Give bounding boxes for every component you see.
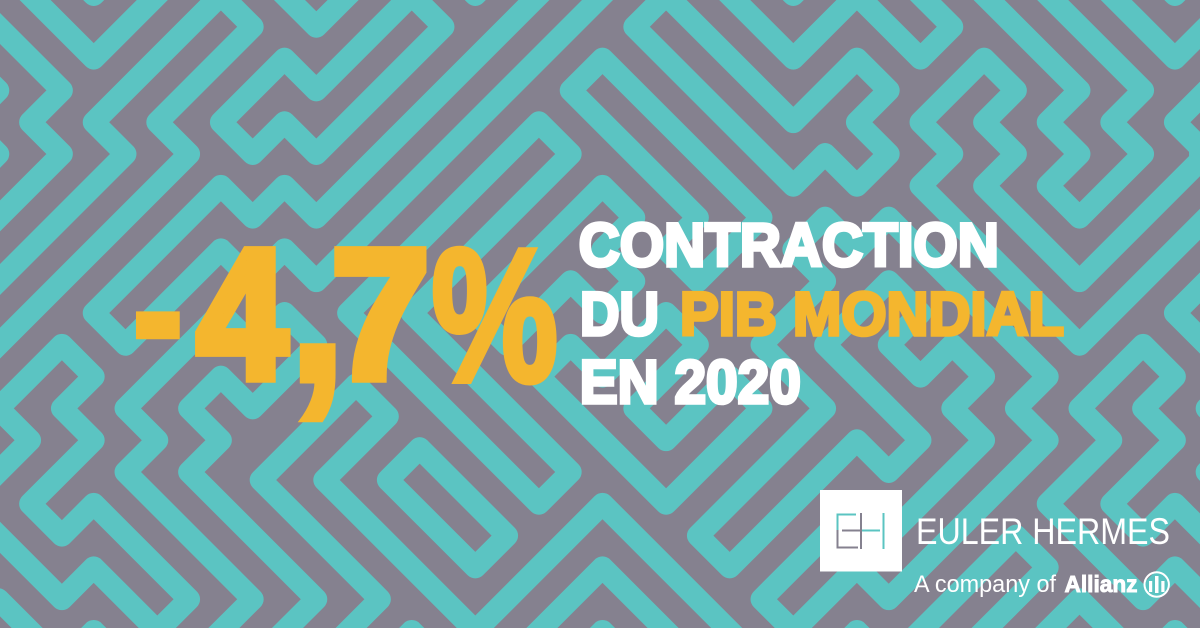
Allianz wordmark: Allianz	[1064, 571, 1138, 597]
big figure: -4,7%	[132, 158, 558, 436]
big figure: -4,7%: ,	[285, 158, 350, 436]
big figure: -4,7%: %	[431, 209, 558, 422]
icon: Allianz roundel	[1144, 572, 1169, 597]
logo: Euler Hermes square	[820, 490, 902, 572]
headline: contraction du PIB mondial en 2020: PIB MONDIAL	[680, 280, 1064, 348]
headline: contraction du PIB mondial en 2020	[579, 211, 1064, 416]
headline: contraction du PIB mondial en 2020: DU	[580, 280, 659, 348]
brand name: EULER HERMES	[916, 511, 1170, 552]
big figure: -4,7%: 7	[332, 212, 429, 418]
headline: contraction du PIB mondial en 2020: CONTRACTION	[579, 211, 999, 279]
headline: contraction du PIB mondial en 2020: EN 2020	[580, 348, 801, 416]
tagline: A company of	[914, 571, 1056, 598]
big figure: -4,7%: -	[132, 207, 183, 412]
big figure: -4,7%: 4	[197, 211, 287, 417]
